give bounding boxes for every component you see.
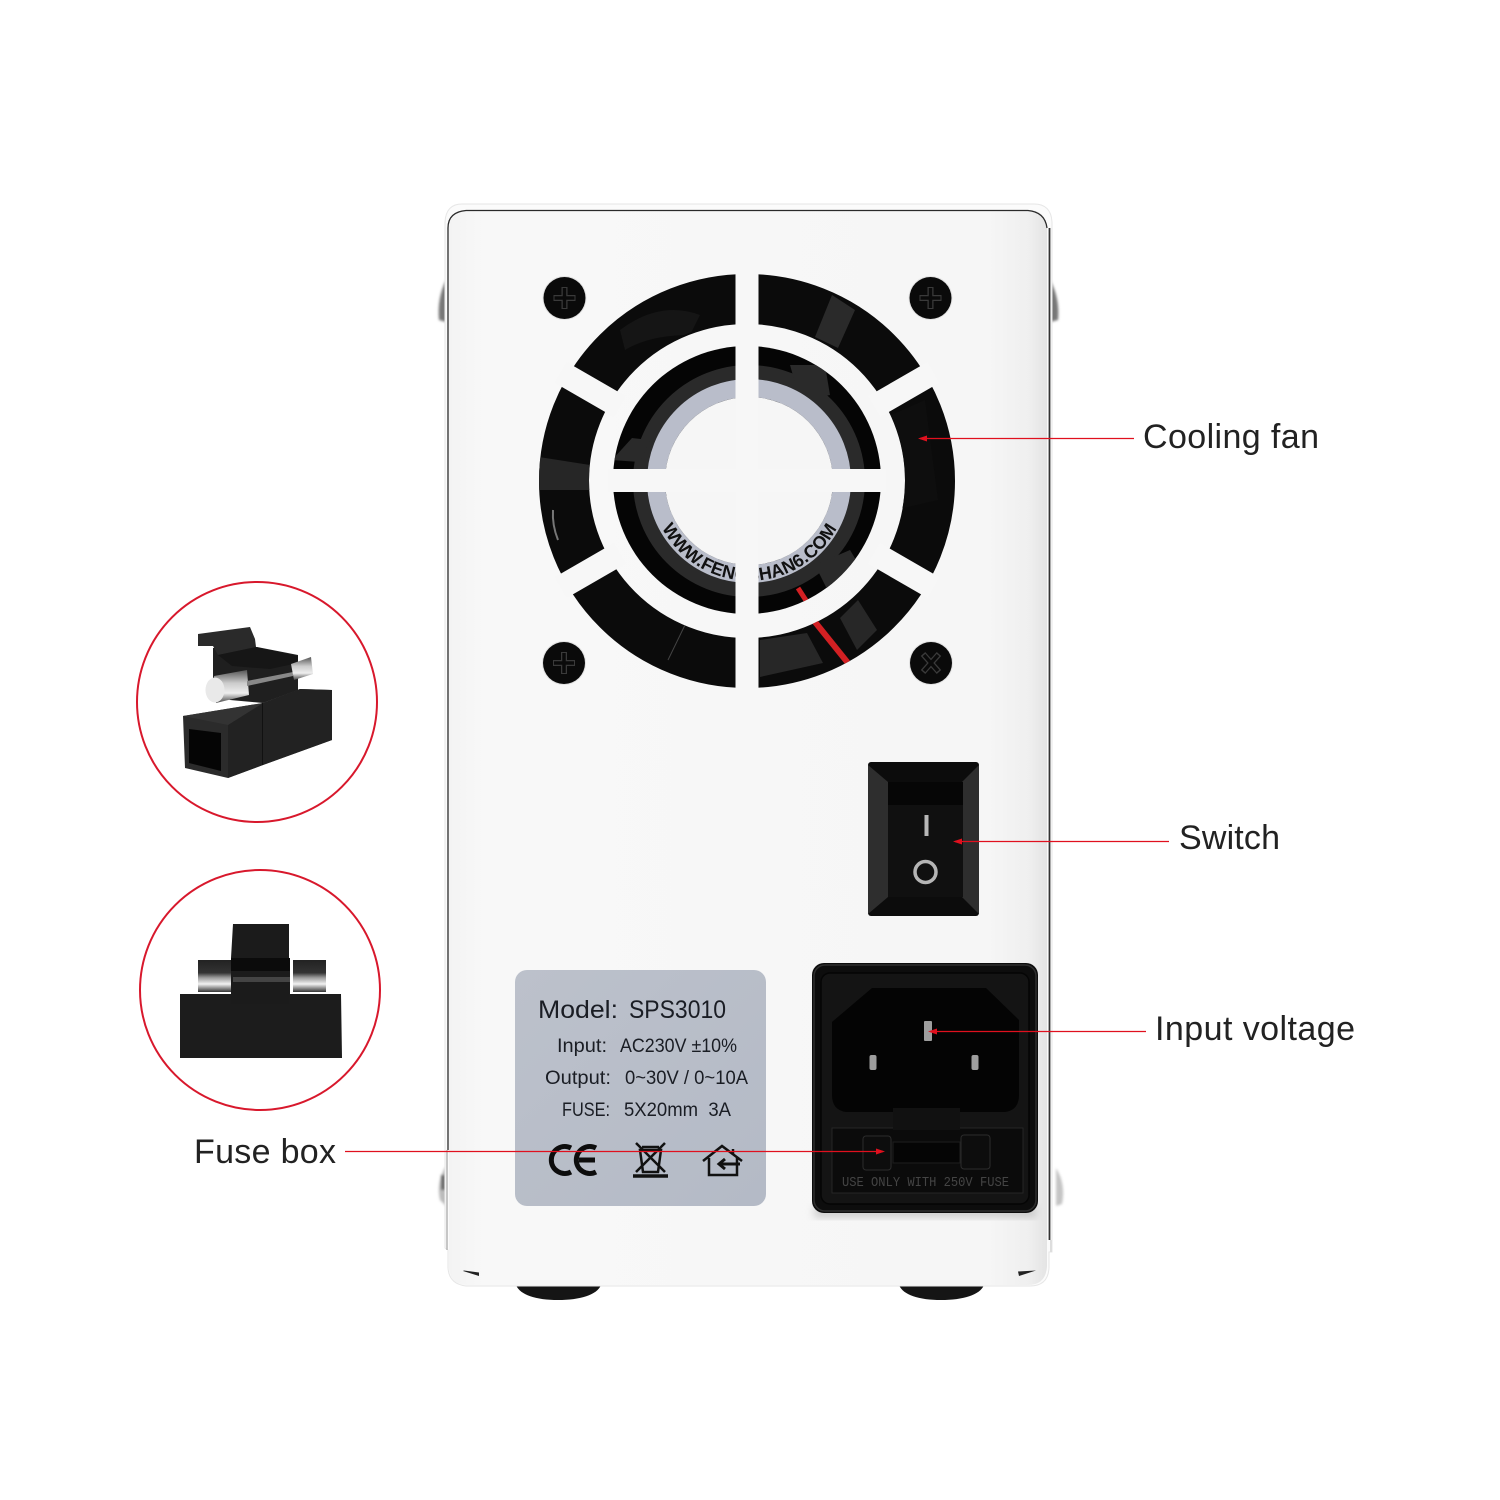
glass fuse [206, 657, 313, 703]
inner fan hub [614, 346, 880, 614]
inlet recess [832, 988, 1019, 1112]
screw top right [908, 276, 952, 320]
input text: AC230V ±10% [620, 1036, 737, 1057]
power supply body [439, 204, 1063, 1300]
fuse text [562, 1100, 731, 1121]
screw bottom right [909, 641, 953, 685]
callout: cooling fan: Cooling fan [1143, 418, 1319, 456]
rear casing [445, 204, 1052, 1286]
mounting screws [542, 276, 953, 685]
callout: switch: Switch [1179, 819, 1280, 857]
inlet pins [870, 1021, 978, 1070]
input text: Input: [557, 1036, 607, 1057]
fuse holder [231, 924, 290, 1004]
callout: fuse box [194, 1133, 885, 1171]
switch on mark [924, 815, 928, 836]
fuse holder tab [198, 627, 256, 655]
screw top left [542, 276, 586, 320]
output text: 0~30V / 0~10A [625, 1068, 748, 1089]
rubber feet [516, 1285, 984, 1300]
fan maker text: WWW.FENGSHAN6.COM [663, 522, 836, 580]
icon: indoor use house [703, 1146, 742, 1175]
callout: input voltage: Input voltage [1155, 1010, 1355, 1048]
IEC power socket with fuse drawer [812, 963, 1038, 1218]
power switch [868, 762, 979, 916]
rating label [515, 970, 766, 1206]
fuse caps [198, 960, 326, 992]
fuse text: FUSE: [562, 1100, 610, 1121]
cooling fan and grille [539, 274, 955, 688]
callout: input voltage [928, 1010, 1355, 1048]
rear panel face [449, 210, 1047, 1285]
screw bottom left [542, 641, 586, 685]
switch off mark [915, 862, 936, 882]
fuse detail circle, angled view [137, 582, 377, 822]
callout: fuse box: Fuse box [194, 1133, 336, 1171]
input text [557, 1036, 737, 1057]
fuse holder web [213, 647, 298, 703]
fuse holder block [183, 689, 332, 778]
callout: switch [953, 819, 1280, 857]
output text [545, 1068, 748, 1089]
model text: Model: [538, 996, 618, 1024]
holder base [180, 994, 342, 1058]
fuse warning text: USE ONLY WITH 250V FUSE [842, 1175, 1009, 1191]
outer fan ring [539, 295, 938, 677]
infographic: rear of power supply [136, 204, 1354, 1300]
model text: SPS3010 [629, 996, 726, 1024]
output text: Output: [545, 1068, 611, 1089]
grille bars [555, 265, 939, 695]
fuse detail circle, front view [140, 870, 380, 1110]
fuse text: 5X20mm 3A [624, 1100, 731, 1121]
model text [538, 996, 726, 1024]
icon: CE mark [551, 1146, 596, 1174]
fuse drawer [832, 1108, 1023, 1193]
side nubs [439, 280, 1063, 1206]
callout: cooling fan [918, 418, 1319, 456]
icon: crossed-out bin [633, 1143, 668, 1176]
